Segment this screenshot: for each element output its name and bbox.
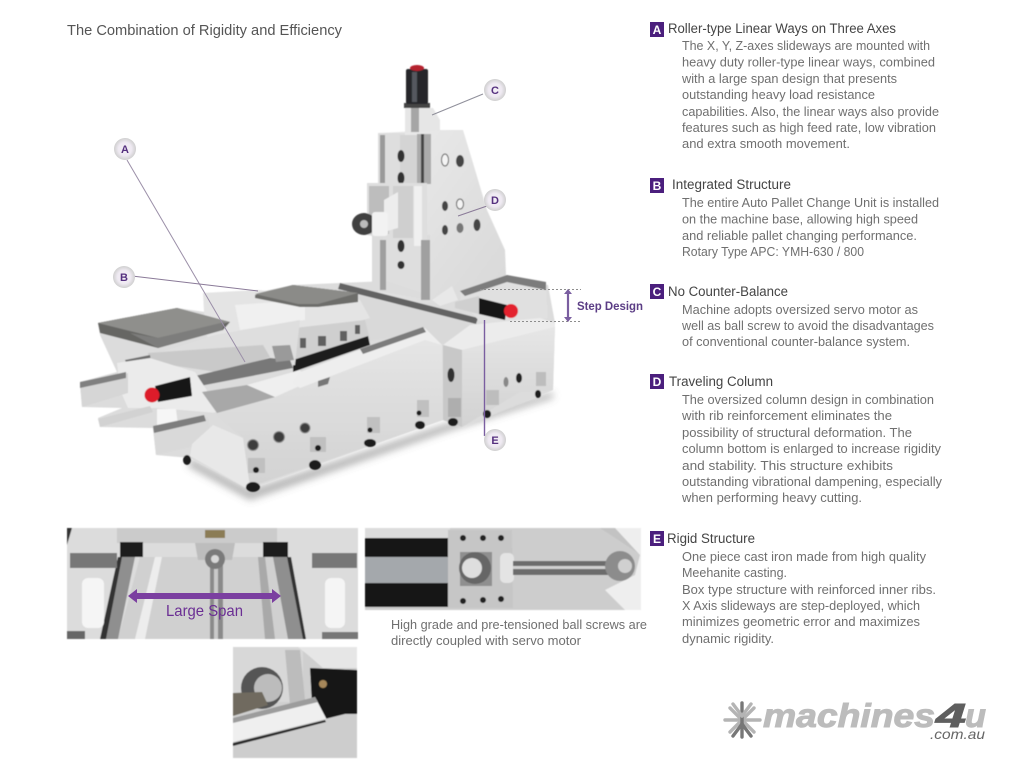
traveling column (352, 65, 507, 305)
callout A: A (121, 144, 129, 156)
body B: on the machine base, allowing high speed (682, 212, 918, 226)
body D: The oversized column design in combination (682, 392, 934, 407)
body A: heavy duty roller-type linear ways, combined (682, 54, 935, 70)
body A: The X, Y, Z-axes slideways are mounted with (682, 38, 930, 53)
body A: capabilities. Also, the linear ways also provide (682, 104, 939, 119)
body A: and extra smooth movement. (682, 136, 850, 151)
body E (682, 549, 936, 646)
left pallet (98, 308, 230, 348)
badge C (650, 284, 664, 299)
section A (650, 21, 939, 151)
body B: Rotary Type APC: YMH-630 / 800 (682, 244, 864, 259)
spindle (352, 213, 376, 235)
front bed (183, 327, 541, 492)
watermark logo: 4 (934, 697, 966, 734)
body E: Meehanite casting. (682, 565, 787, 580)
body D: when performing heavy cutting. (681, 490, 862, 505)
badge C: C (653, 285, 662, 299)
body C: well as ball screw to avoid the disadvantages (681, 318, 934, 333)
body D: outstanding vibrational dampening, especially (682, 474, 942, 489)
heading D: Traveling Column (669, 374, 773, 389)
badge D: D (653, 375, 662, 389)
callout D: D (491, 195, 499, 207)
body E: Box type structure with reinforced inner ribs. (682, 582, 936, 597)
section B (650, 177, 939, 259)
watermark logo (725, 697, 986, 742)
callout E (484, 429, 506, 451)
badge D (650, 374, 664, 389)
badge A (650, 22, 664, 37)
photo caption: High grade and pre-tensioned ball screws are (391, 617, 647, 632)
body A: features such as high feed rate, low vibration (682, 120, 936, 135)
left end: covers and motor (80, 358, 217, 455)
rear pallet (255, 285, 358, 307)
callout A (114, 138, 136, 160)
saddle (367, 183, 427, 295)
body E: dynamic rigidity. (682, 631, 774, 646)
APC base and Y cover (125, 320, 300, 386)
badge A: A (653, 23, 662, 37)
body B (682, 195, 939, 259)
photo: ball nut (233, 647, 357, 758)
icon: logo star (725, 703, 760, 737)
body D: and stability. This structure exhibits (682, 458, 894, 473)
body E: X Axis slideways are step-deployed, which (682, 598, 920, 613)
badge B (650, 178, 664, 193)
body B: and reliable pallet changing performance. (682, 228, 917, 243)
watermark logo: u (965, 697, 986, 734)
body C (681, 302, 934, 349)
machine illustration (80, 65, 555, 500)
central X-axis bed with rail (300, 283, 482, 345)
body D (681, 392, 942, 505)
photo: servo motor coupled ball screw (365, 528, 641, 610)
purple double arrow (128, 589, 281, 603)
body D: column bottom is enlarged to increase rigidity (682, 441, 941, 456)
body C: Machine adopts oversized servo motor as (682, 302, 918, 317)
callout leader lines (127, 94, 487, 436)
rear pallet bed (203, 290, 370, 345)
callout markers (113, 79, 506, 451)
body C: of conventional counter-balance system. (682, 334, 910, 349)
body D: possibility of structural deformation. The (682, 425, 912, 440)
carriage (277, 320, 370, 372)
floor shadow (188, 392, 553, 500)
badge B: B (653, 179, 662, 193)
heading A: Roller-type Linear Ways on Three Axes (668, 21, 896, 36)
heading C: No Counter-Balance (668, 284, 788, 299)
machine silhouette base (80, 276, 555, 489)
section C (650, 284, 934, 349)
step design dimension: Step Design (577, 301, 643, 313)
large span label: Large Span (166, 603, 243, 620)
Z/X servo motor right (455, 296, 518, 320)
callout E: E (491, 435, 499, 447)
title: The Combination of Rigidity and Efficiency (67, 22, 342, 39)
heading B: Integrated Structure (672, 177, 791, 192)
watermark logo: machines (763, 697, 935, 734)
section D (650, 374, 942, 505)
heading E: Rigid Structure (667, 531, 755, 546)
body E: One piece cast iron made from high quality (682, 549, 926, 564)
callout C (484, 79, 506, 101)
callout B: B (120, 272, 128, 284)
photo: large span (67, 528, 358, 639)
body E: minimizes geometric error and maximizes (682, 614, 920, 629)
badge E (650, 531, 664, 546)
right base with step block (443, 275, 555, 427)
callout D (484, 189, 506, 211)
callout B (113, 266, 135, 288)
body A: with a large span design that presents (681, 71, 897, 86)
photo caption: directly coupled with servo motor (391, 633, 582, 648)
body B: The entire Auto Pallet Change Unit is installed (682, 195, 939, 210)
callout C: C (491, 85, 499, 97)
section E (650, 531, 936, 646)
body A (681, 38, 939, 151)
watermark logo: .com.au (930, 726, 985, 742)
badge E: E (653, 532, 661, 546)
body A: outstanding heavy load resistance (682, 87, 875, 102)
body D: with rib reinforcement eliminates the (681, 408, 892, 423)
column holes (442, 154, 480, 235)
photo caption (391, 617, 647, 648)
step design dimension (480, 289, 643, 322)
